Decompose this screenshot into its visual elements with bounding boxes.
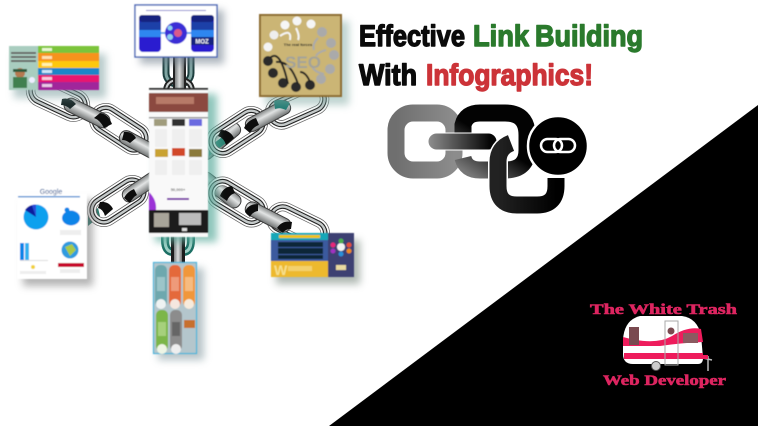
- infographic: tan SEO wheel: The real forces: [284, 42, 313, 47]
- infographic: blue moz diagram, top: [135, 5, 224, 64]
- infographic: central page: 50,000+: [171, 187, 186, 192]
- infographic: blue moz diagram, top: MOZ: [195, 40, 209, 46]
- title line 2: [359, 59, 593, 92]
- infographic: central page: [149, 88, 217, 242]
- infographic: right WordPress panel: [271, 233, 360, 284]
- chain: bottom vertical: [165, 232, 191, 263]
- brand name line 1: The White Trash: [590, 302, 738, 318]
- title line 1: Link: [473, 20, 529, 53]
- chain: upper left: [27, 75, 168, 164]
- infographic: colourful list, top left: [9, 46, 106, 98]
- title line 1: [359, 20, 643, 53]
- infographic: bottom teal columns: [154, 262, 204, 360]
- chain: lower right: [196, 169, 329, 249]
- title line 2: With: [359, 59, 417, 92]
- chain: upper right: [196, 83, 328, 163]
- chain: lower left: [87, 165, 169, 227]
- title line 1: Effective: [359, 20, 465, 53]
- chain: top vertical: [166, 46, 192, 90]
- infographic: tan SEO wheel: SEO: [285, 53, 321, 72]
- black diagonal background: [329, 105, 758, 426]
- infographic: tan SEO wheel: [260, 15, 349, 105]
- infographic: right WordPress panel: W: [274, 262, 288, 278]
- title line 1: Building: [535, 20, 643, 53]
- brand name line 2: Web Developer: [603, 373, 726, 389]
- icon: chain links logo: [396, 113, 588, 205]
- title line 2: Infographics!: [426, 59, 593, 92]
- icon: pink and white camper trailer: [623, 316, 712, 371]
- infographic: Google stats: [17, 189, 93, 286]
- infographic: Google stats: Google: [40, 189, 62, 196]
- brand logo: The White Trash Web Developer: [590, 302, 738, 389]
